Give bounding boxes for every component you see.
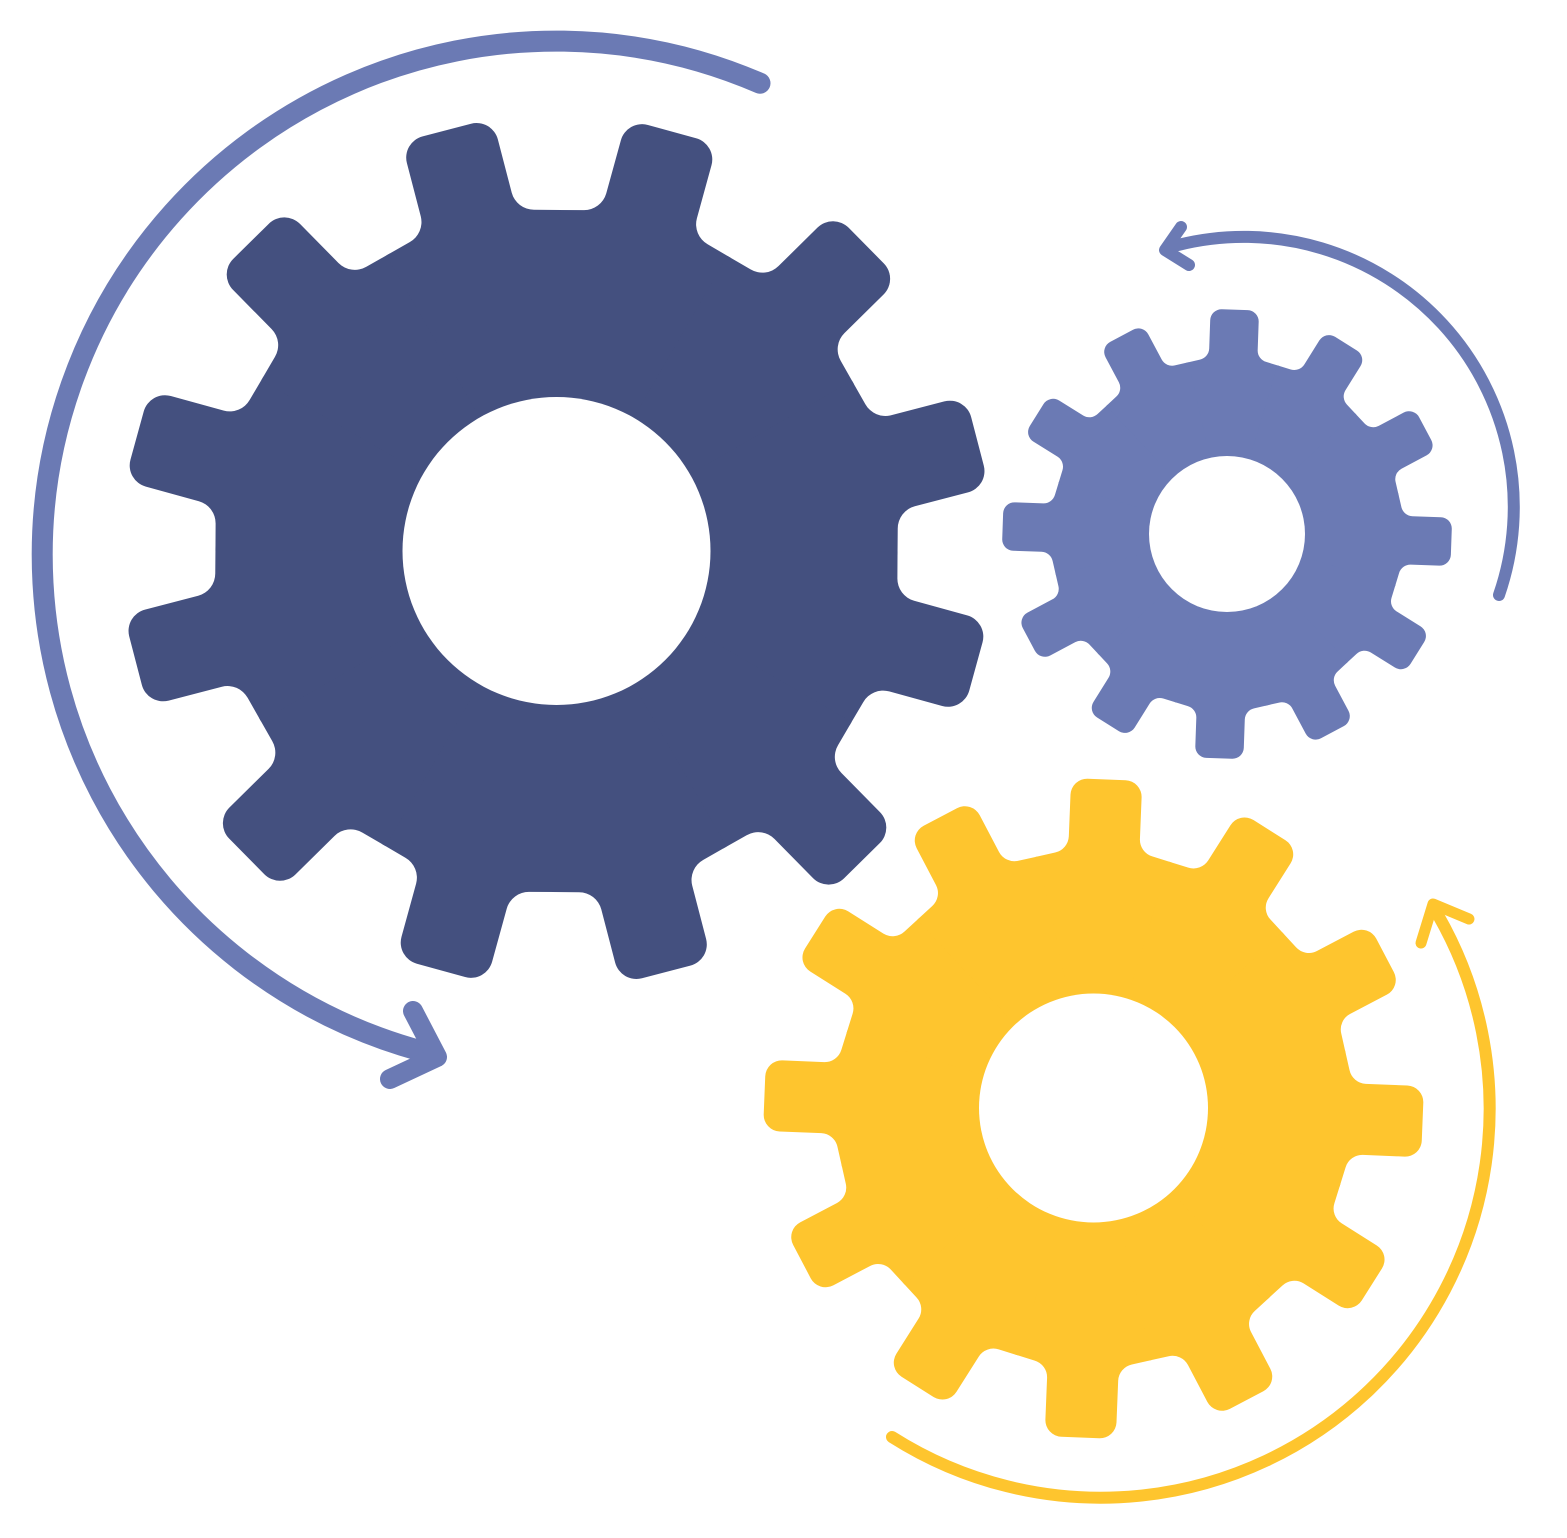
arrow: medium gear rotation [1165, 227, 1514, 595]
large dark blue gear [22, 16, 1091, 1086]
medium blue gear [995, 302, 1459, 766]
yellow gear [751, 766, 1436, 1451]
arrow: large gear rotation [42, 41, 760, 1079]
arrow: yellow gear rotation [892, 904, 1490, 1498]
